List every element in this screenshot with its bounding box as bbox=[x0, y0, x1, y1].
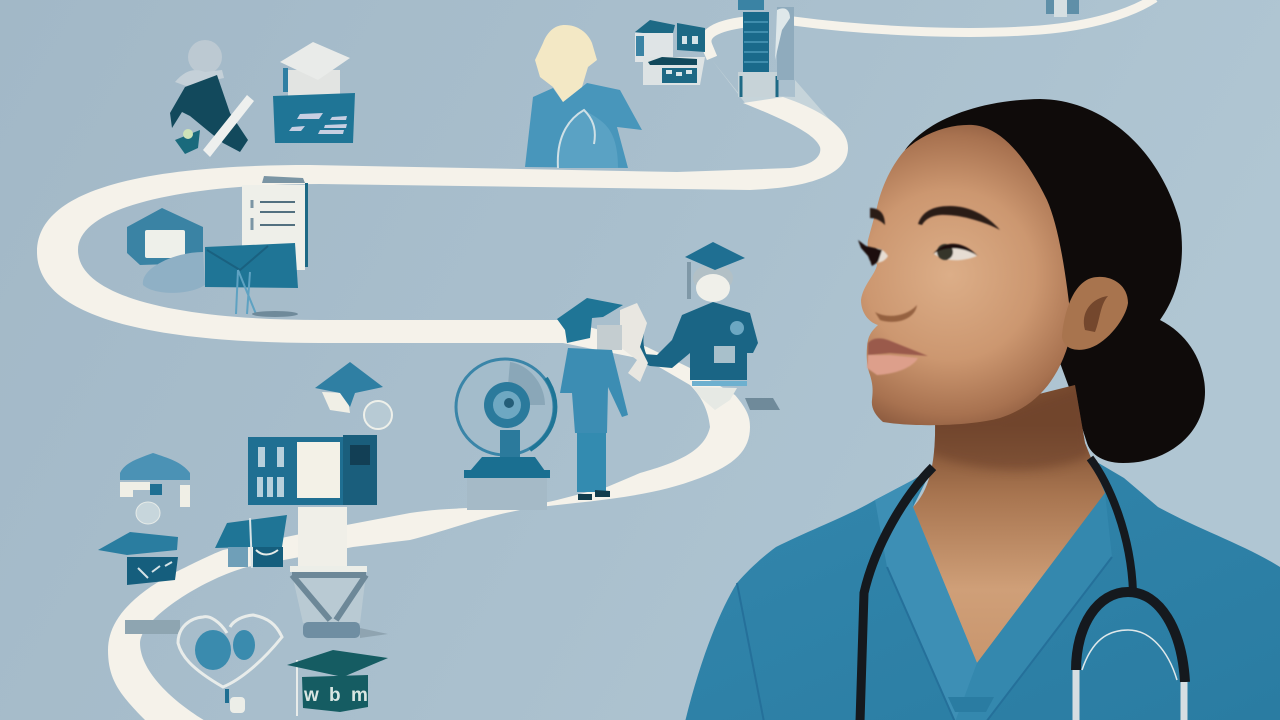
icon: clinic house with checklist bbox=[127, 176, 308, 317]
icon: doorway tower bbox=[738, 0, 794, 97]
icon: hospital building with roof bbox=[248, 362, 392, 505]
icon: open box bbox=[215, 515, 287, 568]
icon: lower-left roofed houses bbox=[98, 453, 190, 585]
neck bbox=[913, 385, 1108, 663]
icon: small green-roofed school: w bbox=[303, 685, 319, 706]
icon: heart outline bbox=[178, 615, 282, 713]
icon: graduate and colleague figures bbox=[557, 242, 780, 500]
stethoscope bbox=[860, 458, 1185, 720]
hair and bun bbox=[905, 99, 1205, 463]
scrub top bbox=[685, 458, 1280, 720]
nose shadow bbox=[875, 305, 917, 322]
scrub collar right bbox=[955, 493, 1112, 720]
icon: elderly patient with stethoscope bbox=[525, 25, 642, 168]
icon: funnel stand machine bbox=[125, 507, 388, 638]
face bbox=[861, 125, 1072, 425]
neck shadow bbox=[934, 394, 1090, 473]
icon: graduation cap on folder bbox=[273, 42, 355, 143]
icon: clinic buildings bbox=[635, 20, 705, 85]
nurse portrait bbox=[685, 99, 1280, 720]
icon: small green-roofed school bbox=[287, 650, 388, 716]
icon: top-right small figure bbox=[1046, 0, 1079, 17]
eyebrows bbox=[870, 206, 1000, 230]
scrub collar left bbox=[875, 480, 994, 720]
icon: small green-roofed school: b bbox=[329, 685, 341, 706]
icon: seated figure with diploma bbox=[170, 40, 254, 157]
eyes bbox=[858, 240, 978, 266]
icon: medical scanner machine bbox=[456, 359, 555, 510]
lips bbox=[867, 338, 928, 375]
icon: small green-roofed school: m bbox=[351, 685, 368, 706]
ear bbox=[1062, 277, 1128, 350]
